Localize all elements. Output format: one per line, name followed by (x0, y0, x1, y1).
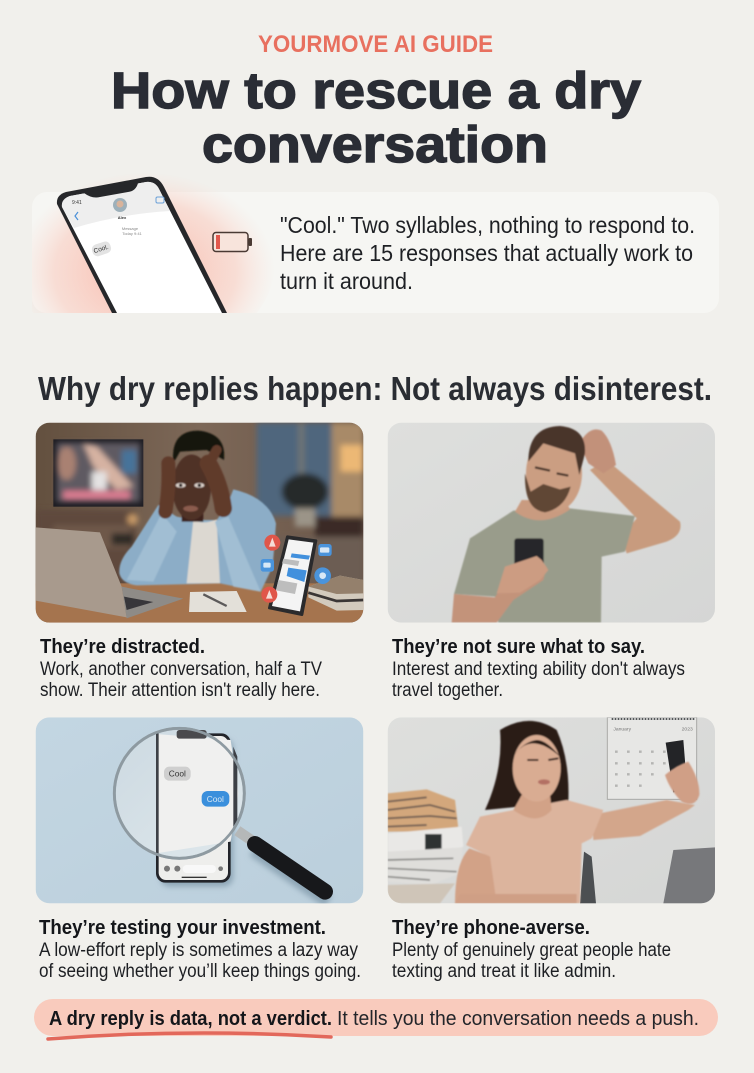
caption: they're distracted: They’re distracted. (40, 635, 205, 658)
intro illustration: phone with low battery: Message (122, 226, 139, 231)
intro text: turn it around. (280, 268, 413, 294)
callout: data, not a verdict (34, 999, 718, 1039)
woman (455, 721, 695, 903)
intro text: "Cool." Two syllables, nothing to respond to. (280, 212, 695, 238)
laptop (663, 847, 715, 903)
intro illustration: phone with low battery (32, 176, 261, 313)
caption: they're distracted: show. Their attention isn't really here. (40, 680, 320, 701)
books (308, 576, 363, 611)
intro illustration: phone with low battery: Alex (118, 215, 127, 220)
intro text (280, 212, 695, 294)
phone with notifications (261, 535, 332, 615)
caption: they're phone-averse: They’re phone-averse. (392, 916, 590, 939)
magnifier handle (237, 831, 255, 843)
title: conversation (202, 116, 548, 173)
icon: low battery (213, 232, 252, 252)
caption: they're not sure what to say (392, 635, 685, 701)
caption: they're phone-averse: texting and treat it like admin. (392, 961, 616, 982)
chair (580, 852, 596, 904)
notepad (189, 591, 247, 612)
callout: data, not a verdict: A dry reply is data, not a verdict. (49, 1007, 332, 1030)
paper stack (388, 789, 463, 903)
panel: they're distracted (36, 423, 363, 701)
eyebrow: YOURMOVE AI GUIDE: YOURMOVE AI GUIDE (258, 31, 493, 58)
panel: intro (38, 176, 694, 313)
caption: they're phone-averse (392, 916, 671, 982)
photo: confused man scratching head (388, 423, 715, 623)
panel: they're not sure what to say (388, 423, 715, 701)
intro card background (32, 192, 719, 313)
caption: they're testing your investment: of seeing whether you’ll keep things going. (39, 961, 361, 982)
title (111, 62, 642, 173)
title: How to rescue a dry (111, 62, 642, 119)
calendar (607, 717, 697, 799)
caption: they're testing your investment: They’re testing your investment. (39, 916, 326, 939)
panel: they're testing your investment (36, 717, 363, 982)
callout: data, not a verdict: It tells you the conversation needs a push. (337, 1007, 699, 1030)
intro text: Here are 15 responses that actually work to (280, 240, 693, 266)
intro illustration: phone with low battery: 9:41 (72, 200, 82, 206)
caption: they're distracted: Work, another conversation, half a TV (40, 659, 322, 680)
caption: they're testing your investment (39, 916, 361, 982)
laptop (36, 527, 127, 617)
calendar: 2023 (682, 727, 693, 733)
bubble: Cool blue (202, 791, 229, 807)
caption: they're not sure what to say: travel together. (392, 680, 503, 701)
bubble: Cool grey (164, 767, 191, 781)
photo: magnifying glass over phone (36, 717, 363, 903)
caption: they're distracted (40, 635, 322, 701)
magnifier lens (114, 728, 244, 858)
bubble: Cool blue: Cool (207, 794, 224, 804)
caption: they're not sure what to say: They’re not sure what to say. (392, 635, 645, 658)
caption: they're testing your investment: A low-effort reply is sometimes a lazy way (39, 940, 358, 961)
intro illustration: phone with low battery: Today 9:41 (122, 231, 143, 236)
caption: they're not sure what to say: Interest and texting ability don't always (392, 659, 685, 680)
calendar: January (613, 727, 632, 733)
hand-drawn underline (48, 1033, 331, 1039)
intro illustration: phone with low battery: Cool. (93, 244, 110, 255)
photo: distracted man at desk (36, 423, 363, 623)
caption: they're phone-averse: Plenty of genuinely great people hate (392, 940, 671, 961)
phone in hand (665, 740, 699, 804)
man (119, 431, 276, 592)
photo: frowning woman with phone (388, 717, 715, 903)
bubble: Cool grey: Cool (169, 768, 186, 778)
panel: they're phone-averse (388, 717, 715, 982)
